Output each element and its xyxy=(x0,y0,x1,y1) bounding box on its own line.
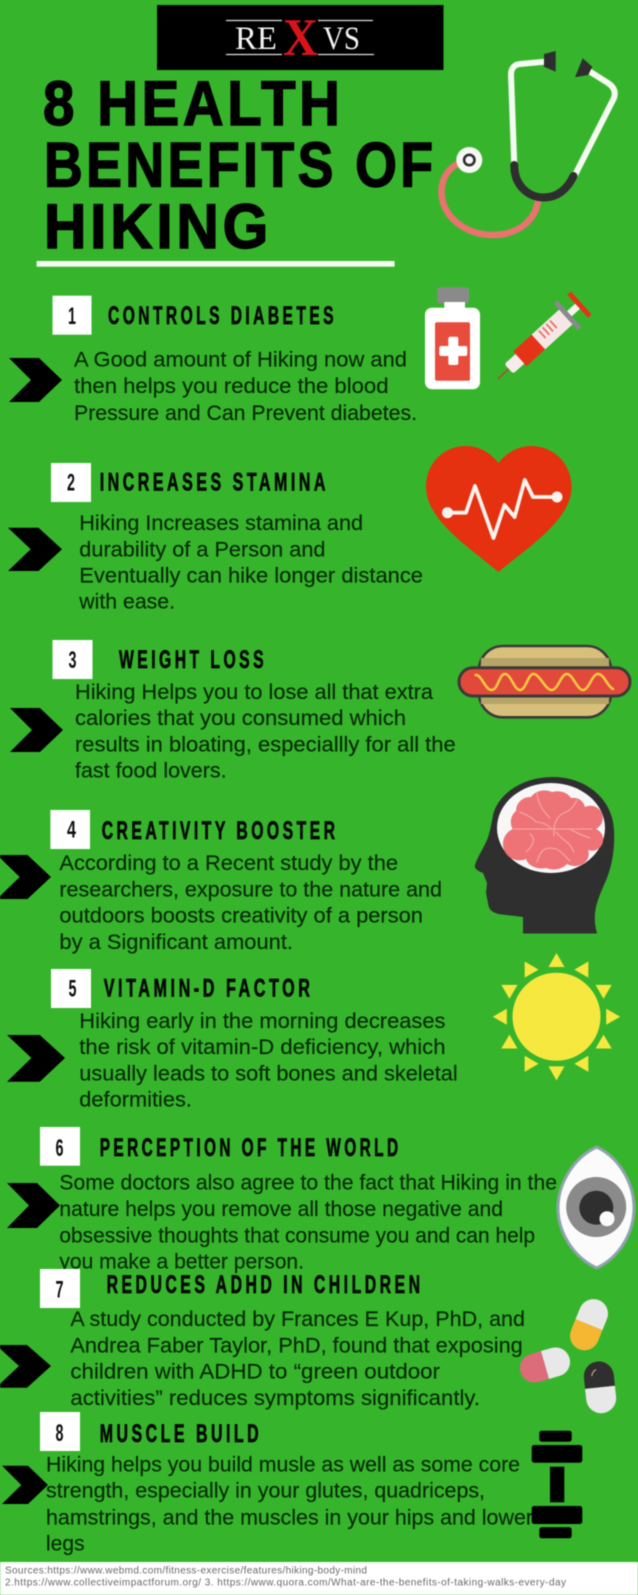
number badge 1 xyxy=(52,296,92,335)
icon: syringe xyxy=(486,290,593,392)
number badge 6 xyxy=(40,1127,80,1166)
icon: dumbbell xyxy=(532,1431,582,1538)
body text 7 xyxy=(70,1307,525,1410)
panel: 3 weight loss xyxy=(10,640,456,783)
number 1: 1 xyxy=(68,303,76,330)
panel: 6 perception of the world xyxy=(7,1127,557,1273)
body text 7: children with ADHD to “green outdoor xyxy=(70,1359,440,1383)
heading 8: MUSCLE BUILD xyxy=(100,1420,262,1448)
number badge 5 xyxy=(51,969,91,1008)
body text 2: with ease. xyxy=(78,590,175,614)
title: BENEFITS OF xyxy=(44,130,436,200)
body text 1: A Good amount of Hiking now and xyxy=(74,348,407,372)
heading 3: WEIGHT LOSS xyxy=(119,646,267,674)
body text 6 xyxy=(59,1170,557,1273)
body text 5: Hiking early in the morning decreases xyxy=(79,1009,446,1033)
title underline xyxy=(37,261,395,267)
chevron 2 xyxy=(8,528,62,571)
heading 6: PERCEPTION OF THE WORLD xyxy=(100,1134,401,1162)
icon: sun xyxy=(493,953,620,1080)
icon: heart with pulse xyxy=(426,446,572,572)
body text 4: researchers, exposure to the nature and xyxy=(59,878,442,902)
body text 5: deformities. xyxy=(79,1088,192,1112)
chevron 7 xyxy=(0,1345,51,1388)
number 3: 3 xyxy=(68,647,76,674)
heading 2: INCREASES STAMINA xyxy=(100,469,329,497)
number 2: 2 xyxy=(67,470,75,496)
logo banner: X xyxy=(283,9,318,67)
body text 6: Some doctors also agree to the fact that Hiking in the xyxy=(59,1170,557,1194)
body text 1: Pressure and Can Prevent diabetes. xyxy=(74,401,417,425)
number 7: 7 xyxy=(56,1277,64,1304)
title xyxy=(43,69,436,262)
body text 4: by a Significant amount. xyxy=(59,930,293,954)
body text 4 xyxy=(59,851,442,954)
body text 4: outdoors boosts creativity of a person xyxy=(59,904,423,928)
heading 7: REDUCES ADHD IN CHILDREN xyxy=(107,1271,423,1299)
body text 2: Eventually can hike longer distance xyxy=(79,564,423,588)
body text 7: activities” reduces symptoms significantly. xyxy=(70,1386,480,1410)
body text 2: durability of a Person and xyxy=(79,538,326,562)
panel: 5 vitamin-d factor xyxy=(7,969,458,1112)
panel: 4 creativity booster xyxy=(0,810,442,954)
title: HIKING xyxy=(44,192,272,262)
body text 2 xyxy=(78,511,423,614)
chevron 3 xyxy=(10,708,63,752)
body text 1 xyxy=(74,348,417,425)
body text 2: Hiking Increases stamina and xyxy=(79,511,363,535)
chevron 6 xyxy=(7,1183,60,1228)
chevron 8 xyxy=(2,1466,48,1504)
number 8: 8 xyxy=(56,1420,64,1447)
panel: 2 increases stamina xyxy=(8,463,423,614)
heading 5: VITAMIN-D FACTOR xyxy=(104,975,314,1003)
body text 7: Andrea Faber Taylor, PhD, found that exposing xyxy=(70,1333,523,1357)
body text 6: you make a better person. xyxy=(59,1249,304,1273)
logo banner: RE xyxy=(235,21,277,57)
icon: hot dog xyxy=(459,646,630,717)
body text 3: results in bloating, especiallly for all the xyxy=(75,733,456,757)
logo banner: VS xyxy=(323,21,360,57)
chevron 1 xyxy=(9,358,62,402)
body text 5: the risk of vitamin-D deficiency, which xyxy=(79,1035,446,1059)
body text 6: obsessive thoughts that consume you and can help xyxy=(59,1223,535,1247)
body text 3: Hiking Helps you to lose all that extra xyxy=(75,680,433,704)
body text 1: then helps you reduce the blood xyxy=(74,374,388,398)
sources footer xyxy=(0,1562,638,1595)
number 4: 4 xyxy=(67,816,76,844)
number badge 7 xyxy=(40,1269,80,1308)
body text 8: legs xyxy=(46,1531,85,1555)
body text 8 xyxy=(46,1453,533,1555)
logo banner xyxy=(157,5,444,70)
body text 3: calories that you consumed which xyxy=(75,706,406,730)
sources footer: 2.https://www.collectiveimpactforum.org/ 3. https://www.quora.com/What-are-the-benefits-of-taking-walks-every-day xyxy=(5,1578,566,1588)
icon: head with brain xyxy=(475,777,614,934)
panel: 7 reduces adhd in children xyxy=(0,1269,525,1410)
number 5: 5 xyxy=(68,976,76,1003)
body text 7: A study conducted by Frances E Kup, PhD, and xyxy=(70,1307,525,1331)
icon: eye xyxy=(558,1147,634,1268)
body text 3 xyxy=(75,680,456,783)
chevron 5 xyxy=(7,1035,65,1082)
number badge 8 xyxy=(40,1412,80,1451)
body text 8: strength, especially in your glutes, quadriceps, xyxy=(46,1479,485,1503)
body text 5: usually leads to soft bones and skeletal xyxy=(79,1062,458,1086)
panel: 1 controls diabetes xyxy=(9,296,417,425)
number badge 2 xyxy=(51,463,91,502)
number badge 4 xyxy=(50,810,90,849)
chevron 4 xyxy=(0,855,51,899)
body text 5 xyxy=(79,1009,458,1112)
sources footer: Sources:https://www.webmd.com/fitness-exercise/features/hiking-body-mind xyxy=(5,1566,367,1576)
number 6: 6 xyxy=(56,1135,64,1162)
heading 1: CONTROLS DIABETES xyxy=(108,302,337,330)
body text 8: Hiking helps you build musle as well as some core xyxy=(46,1453,520,1477)
icon: medicine bottle xyxy=(425,287,480,389)
title: 8 HEALTH xyxy=(43,69,344,139)
body text 6: nature helps you remove all those negative and xyxy=(59,1197,503,1221)
body text 8: hamstrings, and the muscles in your hips and lower xyxy=(46,1505,533,1529)
icon: pills xyxy=(516,1295,618,1415)
heading 4: CREATIVITY BOOSTER xyxy=(102,817,338,845)
icon: stethoscope xyxy=(442,51,615,235)
body text 3: fast food lovers. xyxy=(75,759,227,783)
body text 4: According to a Recent study by the xyxy=(59,851,398,875)
number badge 3 xyxy=(52,640,92,679)
panel: 8 muscle build xyxy=(2,1412,533,1555)
